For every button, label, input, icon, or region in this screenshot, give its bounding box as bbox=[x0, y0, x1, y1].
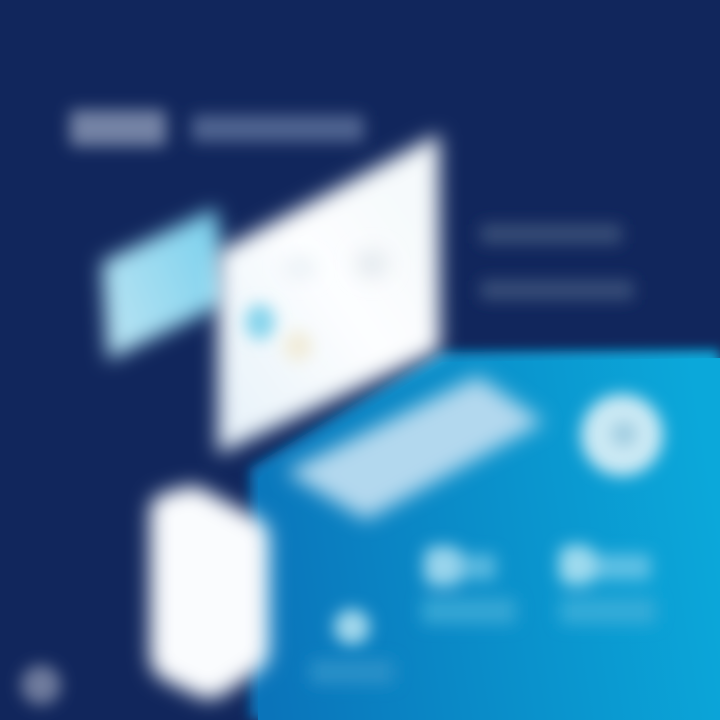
heading: thin words bbox=[192, 115, 364, 142]
chart marker: blue bbox=[245, 304, 275, 340]
badge disc bbox=[581, 394, 663, 476]
monitor body bbox=[218, 134, 440, 454]
icon: round badge bbox=[581, 394, 663, 476]
stat: first bbox=[422, 546, 516, 624]
text block: right of monitor bbox=[480, 224, 634, 300]
panel: floating card bbox=[102, 208, 228, 360]
text line one bbox=[480, 224, 622, 244]
stat icon bbox=[559, 545, 595, 585]
badge centre bbox=[612, 422, 636, 446]
stat caption bbox=[422, 598, 516, 624]
panel: blue lower-right area bbox=[250, 350, 720, 720]
chart marker: pale middle bbox=[284, 259, 316, 277]
heading bbox=[70, 110, 364, 146]
text line two bbox=[480, 280, 634, 300]
panel: monitor screen bbox=[218, 134, 440, 454]
chart marker: pale upper bbox=[356, 250, 388, 278]
heading: bold word bbox=[70, 110, 166, 146]
stat caption bbox=[310, 660, 394, 684]
stat icon bbox=[424, 546, 462, 586]
stat icon bbox=[334, 609, 370, 645]
phone bbox=[150, 486, 269, 699]
chart marker: amber bbox=[284, 331, 312, 361]
stat label bbox=[460, 554, 496, 580]
stat caption bbox=[560, 598, 656, 624]
footer logo bbox=[21, 665, 61, 705]
stat: third bbox=[310, 609, 394, 684]
keyboard bbox=[286, 376, 544, 520]
stat: second bbox=[559, 545, 656, 624]
stat label bbox=[595, 554, 651, 580]
